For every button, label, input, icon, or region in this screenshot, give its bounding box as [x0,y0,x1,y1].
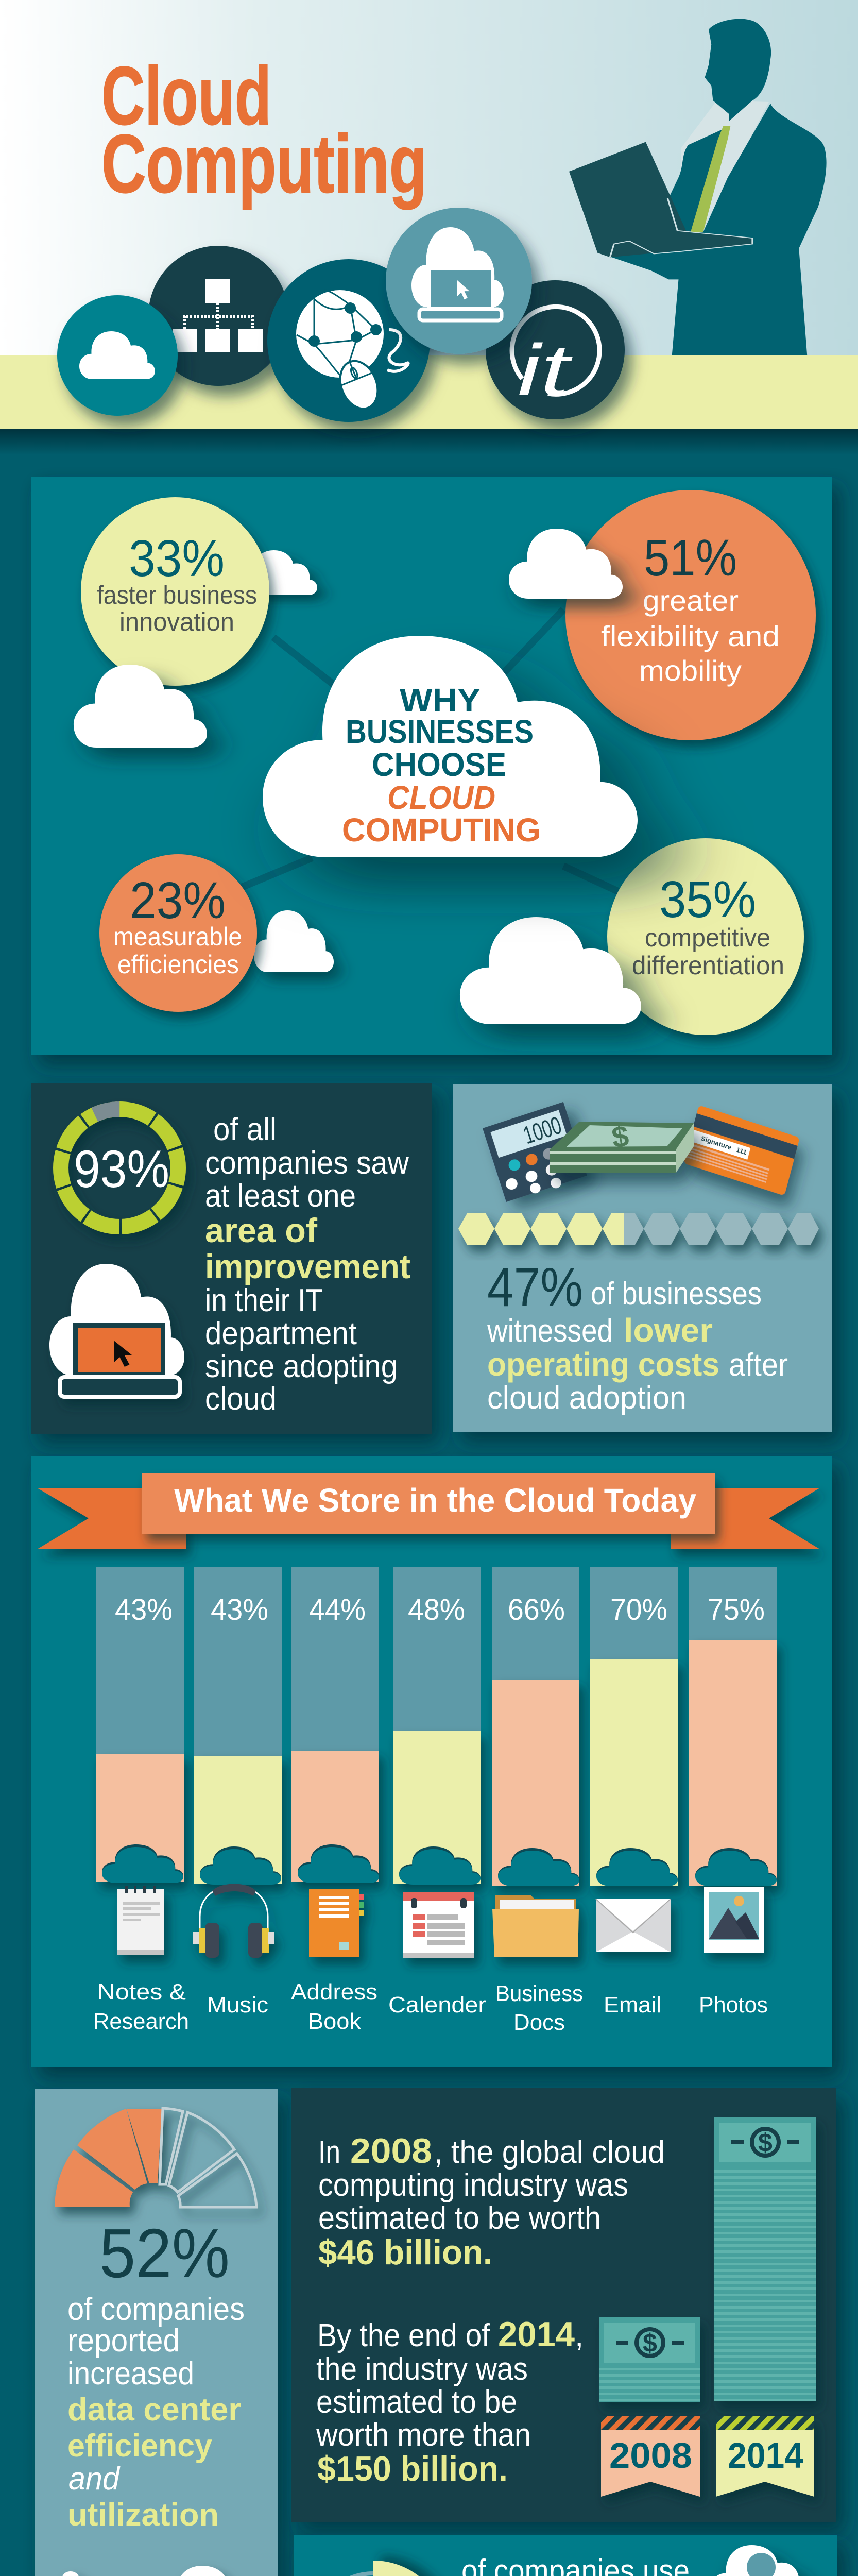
header sky background [0,0,858,355]
bar: music 43%: 43% [211,1593,268,1626]
icon: calculator [483,1102,588,1205]
category labels: Book [308,2009,362,2034]
icon circle: cloud [57,295,178,416]
title: Cloud [101,49,271,142]
stat: 33% faster business innovation: innovation [119,607,234,636]
52% value: 52% [99,2214,230,2292]
header section [0,0,858,455]
text 2014: the industry was [316,2351,528,2387]
stat: 51% greater flexibility and mobility: mobility [639,654,742,687]
icon: cash stack: $ [610,1119,631,1155]
stat: 51% greater flexibility and mobility: 51% [644,529,737,587]
52% text: efficiency [67,2428,213,2464]
stat: 51% greater flexibility and mobility: flexibility and [601,620,780,652]
bar: email 70% [590,1567,678,1886]
47% text: cloud adoption [487,1380,687,1416]
category labels: Business [495,1981,583,2006]
stat: 33% faster business innovation: 33% [129,530,225,587]
cloud top right [509,529,623,599]
text 2008: estimated to be worth [318,2200,601,2236]
stat: 35% competitive differentiation: differentiation [632,951,784,980]
category labels: Docs [513,2010,565,2035]
icon: address book [309,1889,364,1957]
stat: 35% competitive differentiation: 35% [659,871,756,928]
icon circle: cloud laptop [386,208,532,354]
panel: 86% multiple cloud services [294,2535,837,2576]
body text: since adopting [205,1349,398,1384]
icon: calendar [403,1892,474,1958]
icon: credit card: 111 [735,1146,748,1157]
category labels: Notes & [97,1979,186,2005]
connector lines [241,609,618,891]
text 2008: 2008 [350,2131,432,2171]
bar: calender 48% [393,1567,481,1885]
money stack 2008 [599,2317,700,2402]
category labels: Photos [699,1992,768,2018]
icon: envelope [596,1899,671,1952]
hexagon scale 47% [458,1213,819,1245]
center cloud with heading: CLOUD [387,779,495,816]
banner 2008 [601,2416,700,2497]
category labels: Music [207,1992,268,2018]
panel: industry value 2008 and 2014 [291,2088,836,2522]
panel: 52% data center efficiency [35,2089,278,2576]
text 2008: In [318,2134,340,2170]
banner 2014 [716,2416,814,2497]
47% text [487,1256,788,1416]
93% value: 93% [74,1140,169,1198]
52% text: and [68,2461,121,2497]
body text: department [205,1316,357,1351]
icon: calculator: 1000 [520,1112,565,1149]
category labels [93,1979,768,2035]
stat: 35% competitive differentiation: competitive [645,923,770,952]
stat: 35% competitive differentiation [607,838,804,1035]
small cloud behind 33% [242,550,317,595]
text 2014 [316,2315,584,2488]
bar: business docs 66% [492,1567,579,1886]
47% text: lower [624,1312,713,1349]
money stack 2014: $ [758,2128,773,2157]
52% text: data center [67,2392,241,2428]
panel: why businesses choose cloud computing [31,477,832,1055]
bar: notes and research 43%: 43% [115,1593,173,1626]
52% text: utilization [67,2497,219,2533]
47% text: of businesses [591,1276,762,1312]
icon: headphones [193,1884,274,1958]
icon: folder [492,1895,579,1957]
yellow desk band [0,355,858,429]
text 2008 [318,2131,665,2272]
category labels: Address [291,1979,377,2005]
category labels: Email [604,1992,661,2018]
icon circle: globe and mouse [267,259,430,422]
text 2008: $46 billion. [318,2233,492,2272]
bar: address book 44% [291,1567,379,1883]
text 2008: , the global cloud [434,2134,665,2170]
bar: calender 48%: 48% [408,1593,465,1626]
stat: 23% measurable efficiencies: 23% [130,872,226,929]
banner 2014: 2014 [728,2435,803,2476]
stat: 51% greater flexibility and mobility [565,490,816,740]
icon: devices and clouds [53,2566,259,2576]
stat: 23% measurable efficiencies: measurable [113,922,242,951]
ribbon heading: What We Store in the Cloud Today [174,1482,696,1519]
title [101,49,427,210]
icon: cloud laptop [49,1264,184,1397]
text 2014: worth more than [316,2417,531,2453]
bar: photos 75% [689,1567,777,1886]
stat: 33% faster business innovation: faster business [97,581,257,609]
body text: improvement [205,1247,410,1285]
icon: photo [704,1887,764,1953]
52% text [67,2292,245,2533]
47% text: operating costs [487,1346,719,1383]
bar: email 70%: 70% [610,1593,667,1626]
bar: business docs 66%: 66% [508,1593,565,1626]
businessman silhouette with laptop [569,19,827,355]
47% text: after [729,1347,788,1383]
body text: of all [213,1112,277,1147]
category labels: Research [93,2009,189,2034]
stat: 51% greater flexibility and mobility: greater [643,584,739,617]
text 2014: , [575,2318,584,2353]
icon circle: it [486,280,625,419]
center cloud with heading: COMPUTING [342,811,541,849]
bar: music 43% [194,1567,282,1885]
panel: 47% of businesses [453,1084,832,1432]
text 2014: 2014 [498,2315,575,2354]
ring chart 93% [42,1090,197,1246]
text 2014: estimated to be [316,2384,517,2420]
icon circle: network [148,246,288,386]
center cloud with heading: BUSINESSES [346,713,534,750]
icon: credit card: Signature [700,1134,732,1151]
body text: at least one [205,1178,356,1214]
small cloud behind 23% [254,910,334,972]
text 2014: By the end of [317,2318,490,2353]
title: Computing [101,117,427,210]
cloud left [74,665,207,748]
ribbon heading [37,1473,820,1549]
panel: what we store in the cloud [31,1456,832,2067]
icon: credit card [683,1105,800,1196]
cloud bottom right [460,917,641,1024]
body text: cloud [205,1381,277,1417]
ring chart 86% [312,2573,435,2576]
bar: photos 75%: 75% [708,1593,765,1626]
52% text: reported [67,2323,180,2359]
icon: notepad [117,1886,164,1955]
center cloud with heading: CHOOSE [372,746,506,783]
gauge chart [55,2108,256,2207]
47% text: witnessed [487,1313,613,1349]
money stack 2014 [714,2117,816,2401]
center cloud with heading [263,636,638,857]
icon: cloud with connected devices [677,2545,829,2576]
52% text: increased [67,2356,194,2392]
banner 2008: 2008 [609,2435,692,2476]
body text [205,1112,410,1417]
center cloud with heading: WHY [400,682,481,719]
stat: 23% measurable efficiencies [99,854,257,1012]
body text: area of [205,1211,318,1249]
text 2008: computing industry was [318,2167,628,2203]
band shadow [0,429,858,455]
bar: address book 44%: 44% [309,1593,366,1626]
text 2014: $150 billion. [317,2449,508,2488]
stat: 23% measurable efficiencies: efficiencies [117,950,239,979]
icon: cash stack [550,1119,694,1173]
bar: notes and research 43% [96,1567,184,1883]
body text: in their IT [205,1283,323,1318]
panel: 93% of companies [31,1083,432,1434]
category labels: Calender [388,1992,486,2018]
body text: companies saw [205,1145,409,1181]
money stack 2008: $ [643,2329,657,2358]
bar chart [96,1567,777,1886]
52% text: of companies [67,2292,245,2327]
47% text: 47% [487,1256,583,1318]
stat: 33% faster business innovation [81,497,269,686]
